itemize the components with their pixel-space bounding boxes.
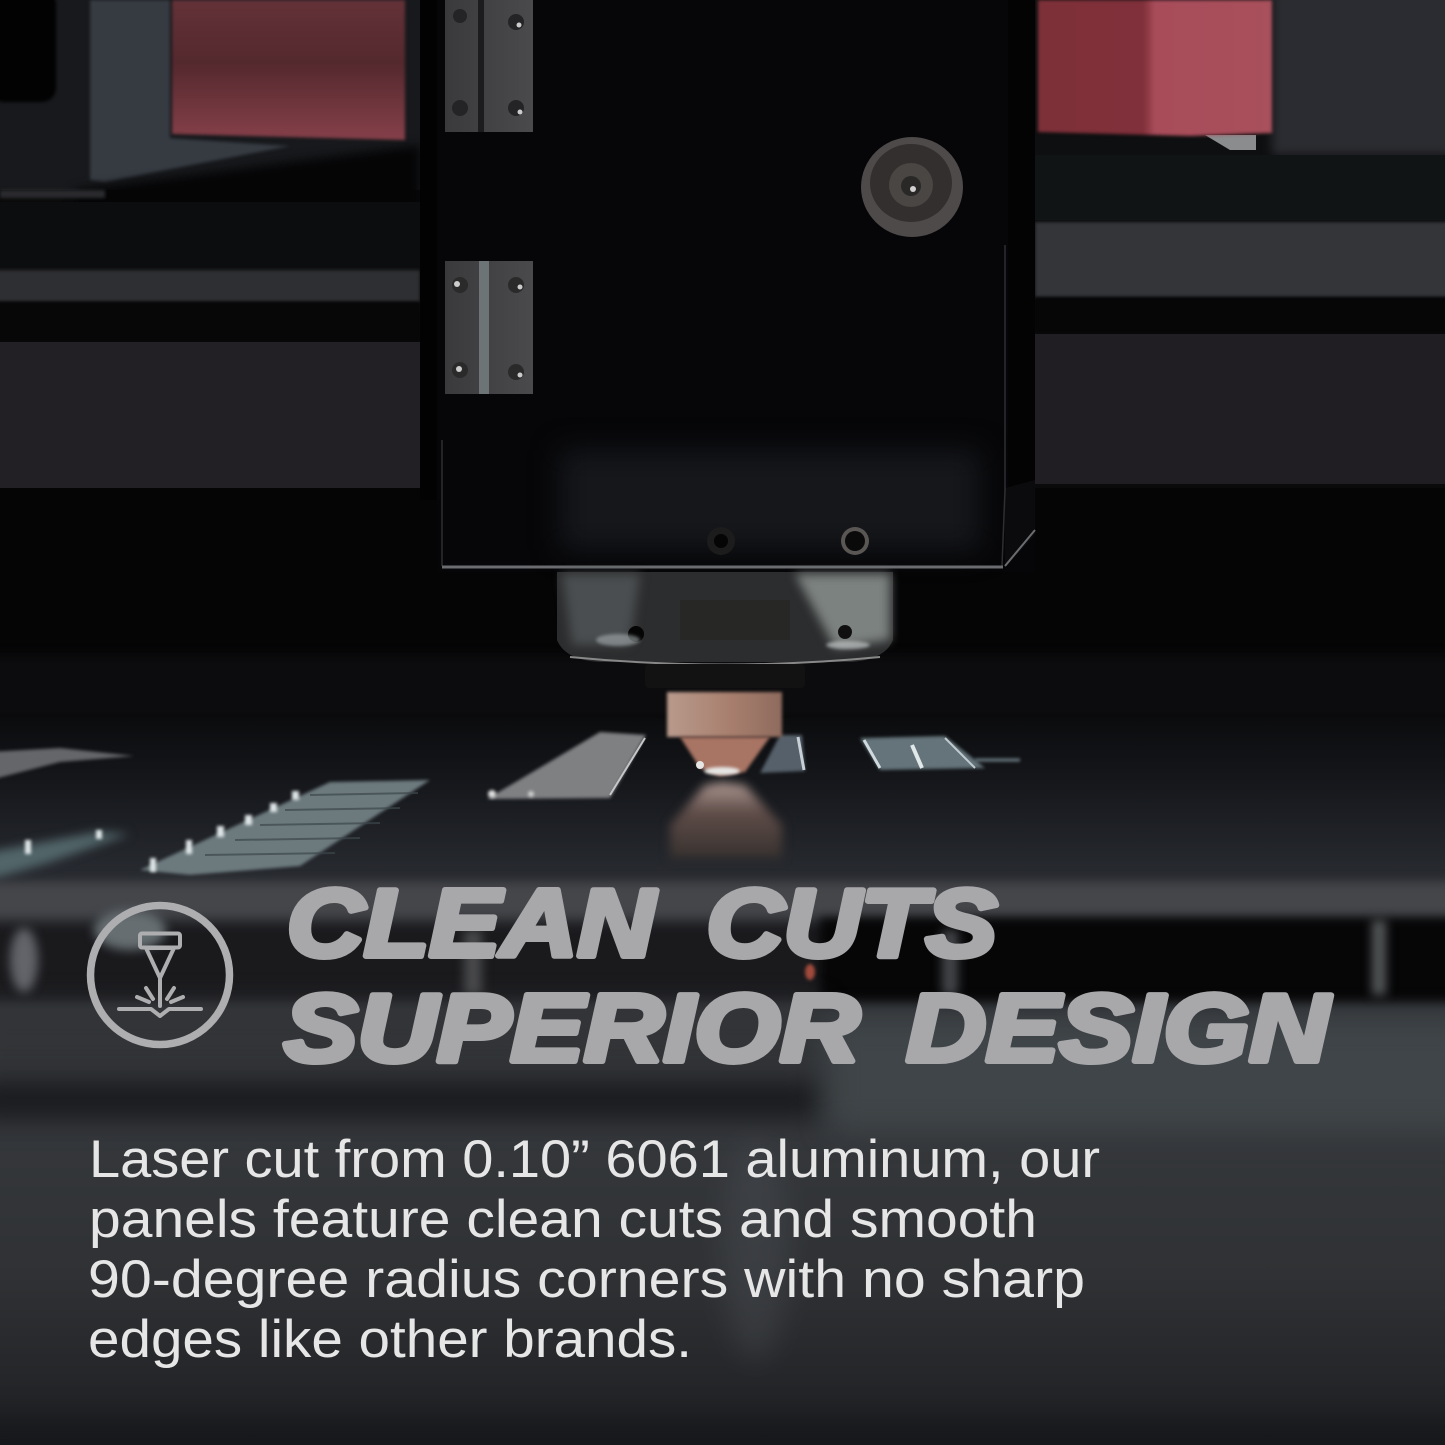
nozzle reflection <box>670 782 782 858</box>
copper nozzle <box>667 692 782 776</box>
lower blurred machine <box>0 882 1445 1445</box>
body text: 90-degree radius corners with no sharp <box>88 1250 1085 1309</box>
cutting head body <box>420 0 1035 572</box>
title <box>284 870 1331 1082</box>
left red block <box>172 0 405 140</box>
left machine housing <box>0 0 437 488</box>
body text: Laser cut from 0.10” 6061 aluminum, our <box>89 1130 1100 1189</box>
body text: panels feature clean cuts and smooth <box>89 1190 1037 1249</box>
cut-out slots on sheet <box>0 732 1020 880</box>
metal sheet <box>0 718 1445 888</box>
body text: edges like other brands. <box>88 1310 692 1369</box>
dark mid band <box>0 488 1445 718</box>
collar ring <box>557 572 893 688</box>
right machine housing <box>1035 0 1445 484</box>
title: CLEAN CUTS <box>287 870 997 977</box>
right red block <box>1038 0 1272 136</box>
hinges <box>445 0 533 394</box>
title: SUPERIOR DESIGN <box>284 975 1331 1082</box>
icon: laser cutting in circle <box>90 906 230 1044</box>
body text <box>88 1130 1100 1369</box>
head screw holes <box>707 527 869 555</box>
round bolt <box>861 137 963 237</box>
